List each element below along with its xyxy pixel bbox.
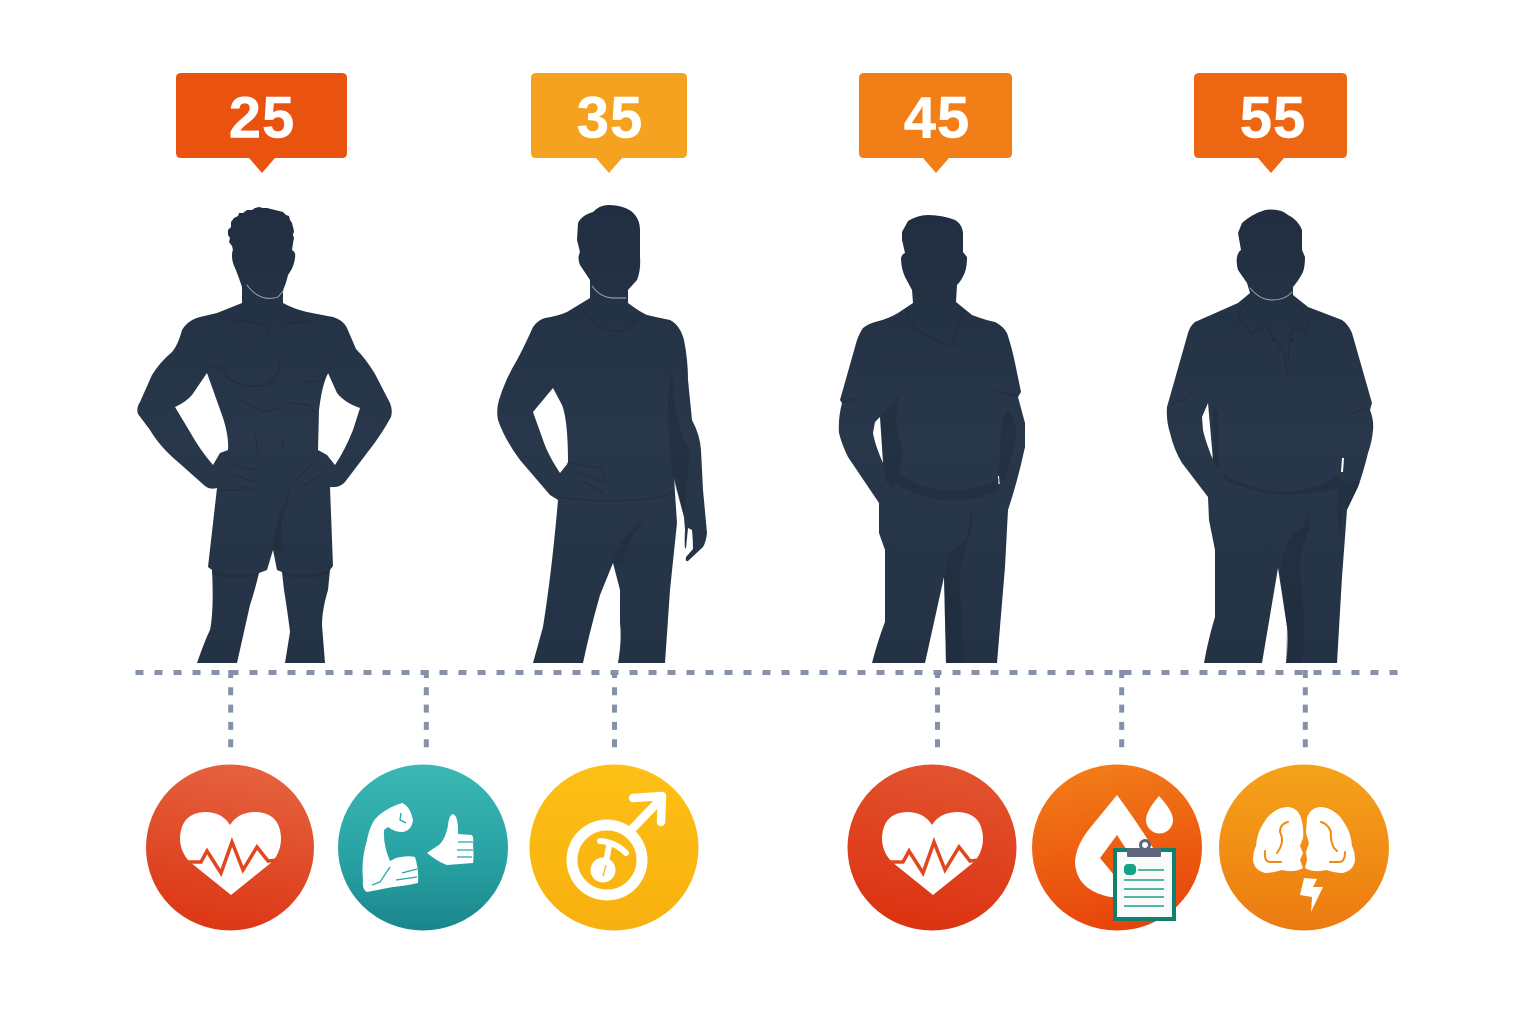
icon: male symbol <box>530 764 698 930</box>
age badge 45 <box>859 73 1012 173</box>
silhouette: man aged 45 <box>839 215 1025 663</box>
age badge 55 <box>1194 73 1347 173</box>
blood drop, large <box>1075 795 1153 897</box>
flexed arm <box>362 803 418 892</box>
silhouette: man aged 25 <box>137 207 392 663</box>
clipboard <box>1113 840 1176 921</box>
icon: heart with pulse, age 45 <box>848 764 1016 930</box>
silhouette: man aged 55 <box>1167 210 1373 663</box>
icon: flexed arm and thumbs up <box>338 764 508 930</box>
thumbs up <box>427 814 474 865</box>
icon: brain with lightning bolt <box>1219 764 1389 930</box>
age badge 35: 35 <box>577 86 643 150</box>
silhouette: man aged 35 <box>497 205 707 663</box>
age badge 25 <box>176 73 347 173</box>
age badge 55: 55 <box>1240 86 1306 150</box>
icon: heart with pulse, age 25 <box>146 764 314 930</box>
age badge 35 <box>531 73 687 173</box>
age badge 25: 25 <box>229 86 295 150</box>
timeline: dotted horizontal line <box>136 670 1400 675</box>
blood drop, small <box>1146 796 1173 834</box>
icon: blood drops and clipboard <box>1032 764 1202 930</box>
connector: dotted lines to icons <box>231 670 1305 748</box>
age badge 45: 45 <box>904 86 970 150</box>
lightning bolt <box>1300 878 1323 912</box>
